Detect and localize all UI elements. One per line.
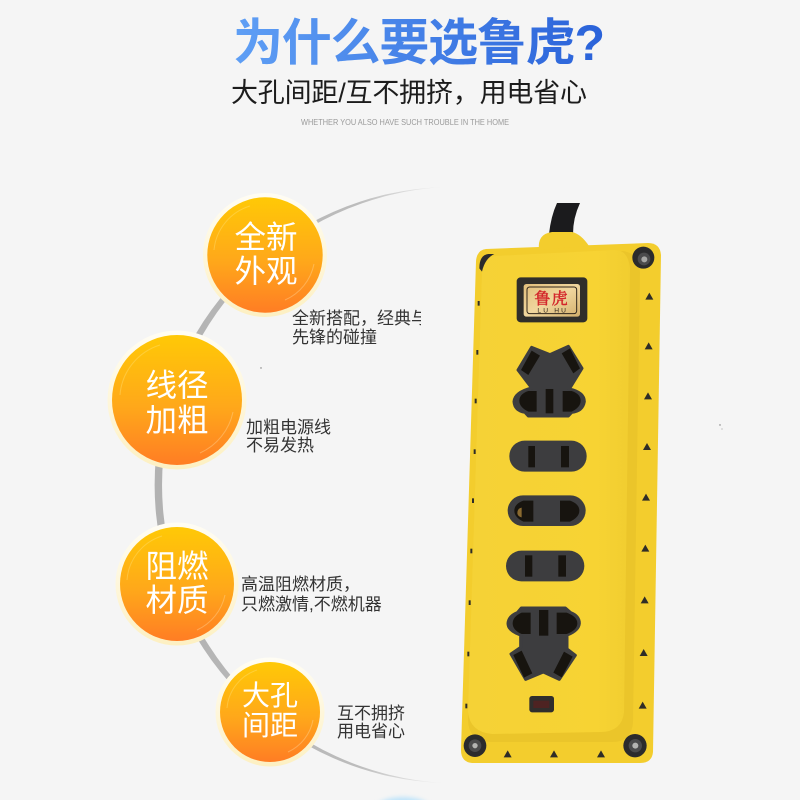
brand badge: 鲁虎 <box>534 290 568 308</box>
title: 为什么要选鲁虎? <box>233 15 605 71</box>
caption: wide socket spacing: 互不拥挤 <box>337 704 405 723</box>
caption: wide socket spacing: 用电省心 <box>337 722 405 741</box>
caption: flame retardant <box>241 575 382 614</box>
feature badge: wide socket spacing <box>216 658 324 766</box>
feature badge: new appearance <box>203 193 327 317</box>
strip base plate <box>461 243 661 763</box>
feature badge: wide socket spacing: 大孔 <box>242 680 298 711</box>
english tagline: WHETHER YOU ALSO HAVE SUCH TROUBLE IN THE HOME <box>301 118 509 127</box>
cord collar <box>539 232 589 250</box>
feature badge: thicker wire: 加粗 <box>145 402 209 438</box>
feature badge: thicker wire: 线径 <box>145 367 209 403</box>
screw: bottom right <box>623 734 647 757</box>
socket: two-pin lower <box>506 551 584 581</box>
screw: top left <box>479 254 494 272</box>
power strip product photo <box>461 203 661 763</box>
indicator light <box>529 696 554 712</box>
feature badge: flame retardant <box>116 522 238 646</box>
screw: top right <box>632 247 654 269</box>
blue glow at bottom edge <box>376 797 430 800</box>
right edge studs upper <box>474 293 653 454</box>
feature badge: new appearance: 全新 <box>234 219 298 255</box>
raised panel shadow <box>468 251 640 742</box>
caption: new appearance: 先锋的碰撞 <box>292 328 377 347</box>
feature badge: new appearance: 外观 <box>234 253 298 289</box>
socket: five-hole bottom <box>508 608 579 679</box>
edge studs lower <box>465 494 650 757</box>
socket: two-pin upper <box>509 441 587 472</box>
caption: new appearance <box>292 309 421 345</box>
raised panel face <box>468 250 630 734</box>
caption: new appearance: 全新搭配，经典与 <box>292 309 428 328</box>
feature badge: wide socket spacing: 间距 <box>242 710 298 741</box>
socket: five-hole top <box>514 346 584 416</box>
upper hardware traced from detail <box>474 247 654 472</box>
caption: wide socket spacing <box>337 704 405 741</box>
curved connector arc <box>155 187 445 783</box>
stray specks <box>260 367 722 430</box>
feature badge: flame retardant: 材质 <box>145 582 209 618</box>
caption: thicker wire: 加粗电源线 <box>246 418 331 437</box>
lower hardware traced from detail <box>464 494 650 757</box>
power cord <box>549 203 580 234</box>
caption: flame retardant: 只燃激情,不燃机器 <box>241 595 382 614</box>
feature badge: thicker wire <box>108 330 246 470</box>
feature badge: flame retardant: 阻燃 <box>145 548 209 584</box>
caption: thicker wire <box>246 418 331 455</box>
brand badge: LU HU <box>537 307 566 314</box>
subtitle: 大孔间距/互不拥挤，用电省心 <box>231 78 587 108</box>
socket: three-hole round <box>508 495 586 526</box>
screw: bottom left <box>464 734 486 757</box>
caption: flame retardant: 高温阻燃材质， <box>241 575 360 594</box>
brand badge <box>517 277 587 322</box>
caption: thicker wire: 不易发热 <box>246 436 314 455</box>
